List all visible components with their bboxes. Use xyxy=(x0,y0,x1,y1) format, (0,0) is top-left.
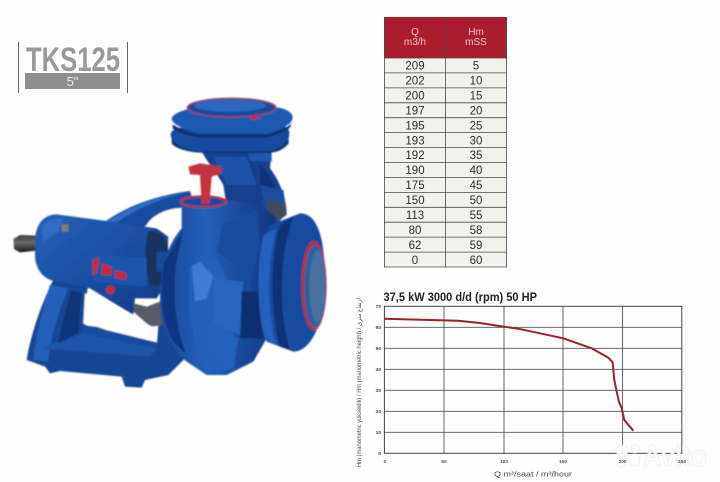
table body: 209 xyxy=(405,60,425,72)
pump illustration xyxy=(13,98,327,388)
x axis labels: 100 xyxy=(500,459,508,465)
table body: 25 xyxy=(470,120,482,132)
table body: 80 xyxy=(409,225,421,237)
pump window xyxy=(147,208,176,233)
pump rib arc xyxy=(78,191,195,252)
pump bearing housing xyxy=(35,214,169,315)
table body: 193 xyxy=(405,136,425,148)
table body: 113 xyxy=(406,210,424,222)
y axis labels: 20 xyxy=(376,409,381,415)
pump shaft xyxy=(13,235,37,252)
table body: 58 xyxy=(470,225,482,237)
table body: 50 xyxy=(470,195,482,207)
table body: 60 xyxy=(470,255,482,267)
table header: Q xyxy=(411,27,419,38)
x axis labels: 50 xyxy=(441,459,447,465)
x axis labels: 150 xyxy=(559,459,567,465)
table body: 0 xyxy=(412,255,418,267)
table body: 55 xyxy=(470,210,482,222)
x axis labels: 0 xyxy=(384,459,387,465)
x axis title: Q m³/saat / m³/hour xyxy=(494,470,573,478)
x axis labels: 250 xyxy=(678,459,686,465)
table header: Hm xyxy=(468,27,484,38)
y axis labels: 60 xyxy=(376,325,381,331)
pump grey bearing block xyxy=(133,302,163,327)
table body: 20 xyxy=(470,106,482,118)
watermark: Avito: Avito xyxy=(643,440,707,473)
pump red handle xyxy=(188,163,222,203)
title badge: TKS125 xyxy=(18,41,128,93)
table body: 192 xyxy=(405,150,425,162)
pump performance chart xyxy=(376,304,682,457)
table header: m3/h xyxy=(404,37,426,48)
y axis labels: 40 xyxy=(376,367,381,373)
model name: TKS125 xyxy=(26,41,120,79)
table body: 30 xyxy=(470,136,482,148)
table body: 45 xyxy=(470,180,482,192)
table body: 15 xyxy=(470,90,482,102)
y axis labels: 0 xyxy=(378,451,381,457)
y axis title: Hm (manometric yükseklik) / Hm (manometric height) / ارتفاع متری xyxy=(355,298,363,467)
size bar: 5" xyxy=(67,74,79,89)
y axis labels xyxy=(376,304,381,457)
x axis labels: 200 xyxy=(619,459,627,465)
pump volute casing xyxy=(160,196,277,375)
performance table xyxy=(384,17,507,267)
pump discharge neck xyxy=(200,148,287,235)
y axis labels: 70 xyxy=(376,304,381,310)
table body: 197 xyxy=(405,106,425,118)
table body xyxy=(384,17,507,267)
chart grid xyxy=(384,306,682,453)
table body: 62 xyxy=(409,240,421,252)
pump right flange xyxy=(259,213,327,352)
table body: 35 xyxy=(470,150,482,162)
table body: 40 xyxy=(470,165,482,177)
table header: mSS xyxy=(465,37,487,48)
table body: 10 xyxy=(470,76,482,88)
table header xyxy=(384,17,507,58)
table body: 150 xyxy=(405,195,425,207)
table body: 202 xyxy=(405,76,425,88)
y axis labels: 10 xyxy=(376,430,381,436)
y axis labels: 50 xyxy=(376,346,381,352)
pump base foot xyxy=(27,273,188,388)
watermark: Avito xyxy=(616,440,707,473)
x axis labels xyxy=(384,459,686,465)
pump gap under housing xyxy=(83,293,157,348)
table body: 195 xyxy=(405,120,425,132)
pump top flange xyxy=(171,98,293,153)
table body: 200 xyxy=(405,90,425,102)
pump logo xyxy=(93,258,127,294)
table body: 175 xyxy=(405,180,425,192)
table body: 59 xyxy=(470,240,482,252)
y axis labels: 30 xyxy=(376,388,381,394)
chart title: 37,5 kW 3000 d/d (rpm) 50 HP xyxy=(384,290,537,304)
pump curve xyxy=(384,319,633,431)
table body: 190 xyxy=(405,165,425,177)
table body: 5 xyxy=(473,60,479,72)
